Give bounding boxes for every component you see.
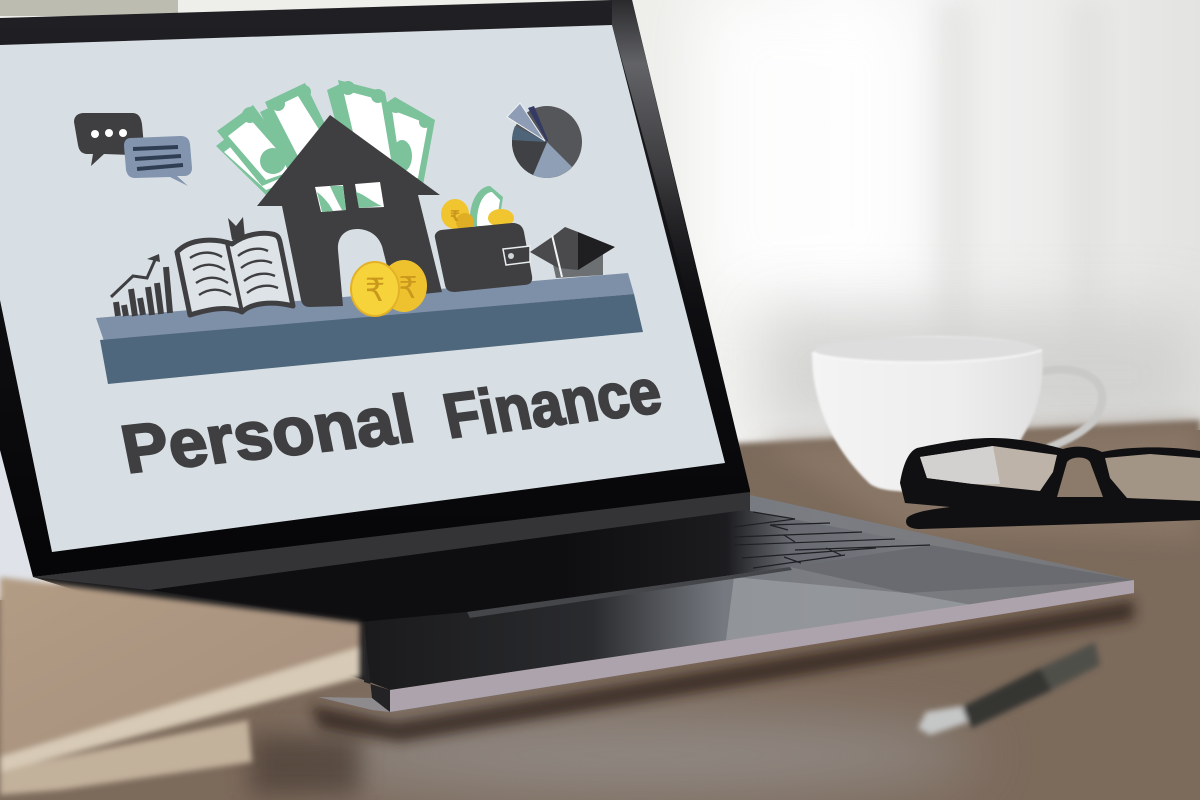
icon: graduation cap <box>530 227 615 278</box>
icon: pie chart <box>507 103 582 178</box>
pen <box>918 642 1100 735</box>
icon: banknotes fan <box>216 80 435 197</box>
icon: wallet with coins and notes <box>435 186 532 292</box>
foreground notebook stack <box>0 577 360 795</box>
laptop base and keyboard deck <box>33 490 1134 712</box>
icon: rupee coins: ₹ <box>398 271 418 306</box>
coffee cup <box>812 336 1102 492</box>
keyboard key grid <box>734 512 930 568</box>
icon: open book <box>177 217 293 315</box>
heading: Personal Finance <box>115 357 667 488</box>
laptop shadow on desk <box>310 600 1134 742</box>
lid right edge highlight <box>612 0 708 320</box>
eyeglasses <box>900 438 1200 529</box>
heading: Personal Finance: Personal <box>115 381 420 488</box>
icon: rupee coins <box>351 260 427 316</box>
wooden desk <box>0 420 1200 800</box>
icon: house <box>257 115 442 307</box>
icon: wallet with coins and notes: ₹ <box>450 207 460 225</box>
icon: line chart <box>111 254 170 316</box>
shelf <box>96 273 643 384</box>
laptop screen <box>0 25 725 552</box>
icon: rupee coins: ₹ <box>365 271 385 309</box>
heading: Personal Finance: Finance <box>437 357 667 452</box>
icon: speech bubbles <box>74 113 192 186</box>
background: bright curtain wall <box>0 0 1200 585</box>
laptop lid bezel <box>0 0 750 577</box>
